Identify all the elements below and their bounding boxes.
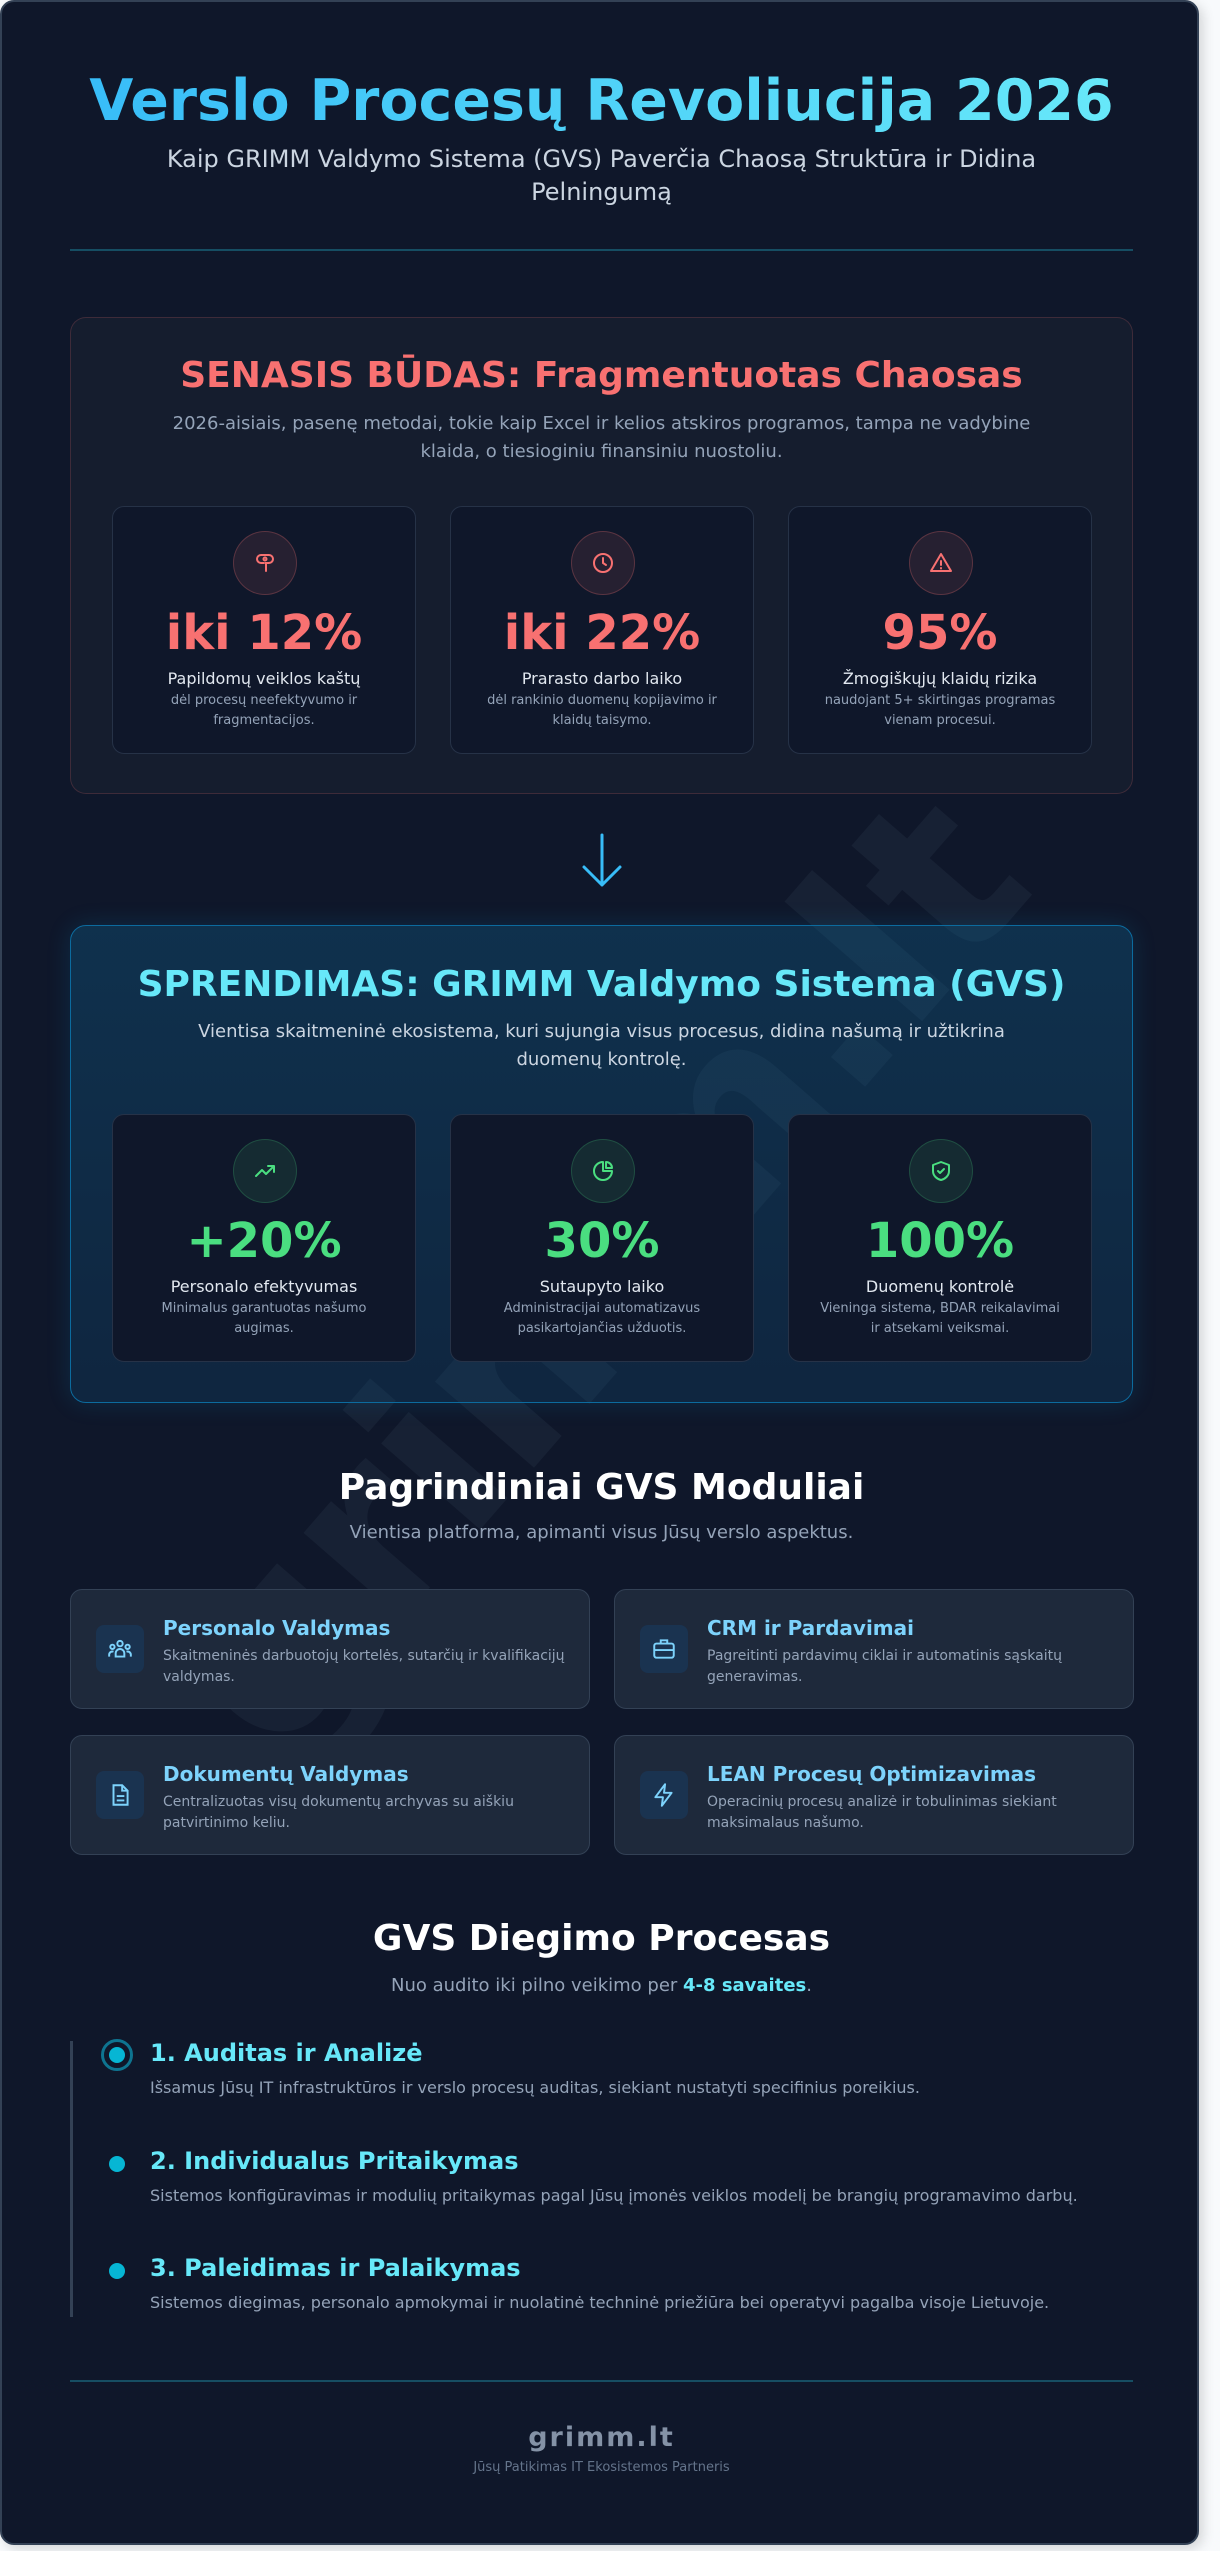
stat: data control — [788, 1114, 1092, 1362]
step 2 — [109, 2147, 1078, 2205]
module: LEAN: LEAN Procesų Optimizavimas — [707, 1762, 1036, 1786]
icon: clock — [571, 531, 635, 595]
icon: pie — [571, 1139, 635, 1203]
stat: data control: 100% — [866, 1213, 1014, 1269]
arrow: down — [582, 834, 622, 887]
stat: human error: Žmogiškųjų klaidų rizika — [843, 669, 1037, 688]
stat: costs — [112, 506, 416, 754]
heading: modules: Pagrindiniai GVS Moduliai — [339, 1467, 864, 1508]
panel: old way — [70, 317, 1133, 794]
step 1: Išsamus Jūsų IT infrastruktūros ir verslo procesų auditas, siekiant nustatyti specifinius poreikius. — [150, 2078, 920, 2097]
heading: solution: SPRENDIMAS: GRIMM Valdymo Sistema (GVS) — [138, 964, 1065, 1005]
stat: time saved: Administracijai automatizavus pasikartojančias užduotis. — [504, 1301, 700, 1336]
step 1 — [101, 2039, 920, 2097]
stat: data control: Duomenų kontrolė — [866, 1277, 1014, 1296]
text: modules sub: Vientisa platforma, apimanti visus Jūsų verslo aspektus. — [350, 1522, 853, 1543]
module: personnel: Skaitmeninės darbuotojų kortelės, sutarčių ir kvalifikacijų valdymas. — [163, 1648, 565, 1685]
text: old way intro: 2026-aisiais, pasenę metodai, tokie kaip Excel ir kelios atskiros programos, tampa ne vadybine klaida, o tiesioginiu finansiniu nuostoliu. — [173, 413, 1030, 462]
watermark: grimm.lt — [108, 741, 1081, 1801]
icon: warning — [909, 531, 973, 595]
stat: lost time: dėl rankinio duomenų kopijavimo ir klaidų taisymo. — [487, 693, 717, 728]
panel: solution — [70, 925, 1133, 1403]
module: documents: Centralizuotas visų dokumentų archyvas su aiškiu patvirtinimo keliu. — [163, 1794, 514, 1831]
title: Verslo Procesų Revoliucija 2026 — [89, 68, 1114, 134]
step 2: 2. Individualus Pritaikymas — [150, 2147, 519, 2175]
stat: time saved — [450, 1114, 754, 1362]
stat: human error — [788, 506, 1092, 754]
module: documents: Dokumentų Valdymas — [163, 1762, 409, 1786]
module: CRM: CRM ir Pardavimai — [707, 1616, 914, 1640]
heading: old way: SENASIS BŪDAS: Fragmentuotas Chaosas — [180, 355, 1023, 396]
module: CRM — [614, 1589, 1134, 1709]
step 3: Sistemos diegimas, personalo apmokymai ir nuolatinė techninė priežiūra bei operatyvi pagalba visoje Lietuvoje. — [150, 2293, 1049, 2312]
stat: time saved: 30% — [545, 1213, 659, 1269]
module: LEAN: Operacinių procesų analizė ir tobulinimas siekiant maksimalaus našumo. — [707, 1794, 1057, 1831]
module: personnel: Personalo Valdymas — [163, 1616, 390, 1640]
icon: piggy — [233, 531, 297, 595]
icon: people — [96, 1625, 144, 1673]
stat: efficiency: +20% — [186, 1213, 342, 1269]
stat: lost time — [450, 506, 754, 754]
stat: efficiency: Minimalus garantuotas našumo augimas. — [162, 1301, 366, 1336]
stat: data control: Vieninga sistema, BDAR reikalavimai ir atsekami veiksmai. — [820, 1301, 1060, 1336]
icon: bolt — [640, 1771, 688, 1819]
module: documents — [70, 1735, 590, 1855]
module: personnel — [70, 1589, 590, 1709]
step 2: Sistemos konfigūravimas ir modulių pritaikymas pagal Jūsų įmonės veiklos modelį be brangių programavimo darbų. — [150, 2186, 1078, 2205]
icon: briefcase — [640, 1625, 688, 1673]
stat: time saved: Sutaupyto laiko — [540, 1277, 664, 1296]
stat: efficiency: Personalo efektyvumas — [171, 1277, 357, 1296]
step 1: 1. Auditas ir Analizė — [150, 2039, 423, 2067]
text: process sub: Nuo audito iki pilno veikimo per 4-8 savaites. — [391, 1975, 812, 1996]
footer: Jūsų Patikimas IT Ekosistemos Partneris — [473, 2460, 730, 2475]
stat: lost time: Prarasto darbo laiko — [522, 669, 682, 688]
stat: costs: Papildomų veiklos kaštų — [168, 669, 360, 688]
heading: process: GVS Diegimo Procesas — [373, 1918, 830, 1959]
step 3 — [109, 2254, 1049, 2312]
module: LEAN — [614, 1735, 1134, 1855]
text: solution intro: Vientisa skaitmeninė ekosistema, kuri sujungia visus procesus, didina našumą ir užtikrina duomenų kontrolę. — [198, 1021, 1005, 1070]
stat: human error: 95% — [883, 605, 997, 661]
footer — [472, 2422, 730, 2475]
step 3: 3. Paleidimas ir Palaikymas — [150, 2254, 521, 2282]
stat: lost time: iki 22% — [504, 605, 700, 661]
stat: costs: dėl procesų neefektyvumo ir fragmentacijos. — [171, 693, 357, 728]
footer: grimm.lt — [528, 2422, 675, 2453]
icon: document — [96, 1771, 144, 1819]
module: CRM: Pagreitinti pardavimų ciklai ir automatinis sąskaitų generavimas. — [707, 1648, 1062, 1685]
stat: efficiency — [112, 1114, 416, 1362]
icon: shield — [909, 1139, 973, 1203]
subtitle: Kaip GRIMM Valdymo Sistema (GVS) Paverčia Chaosą Struktūra ir Didina Pelningumą — [167, 145, 1036, 206]
icon: trend — [233, 1139, 297, 1203]
stat: costs: iki 12% — [166, 605, 362, 661]
stat: human error: naudojant 5+ skirtingas programas vienam procesui. — [825, 693, 1055, 728]
timeline — [70, 2039, 1078, 2317]
